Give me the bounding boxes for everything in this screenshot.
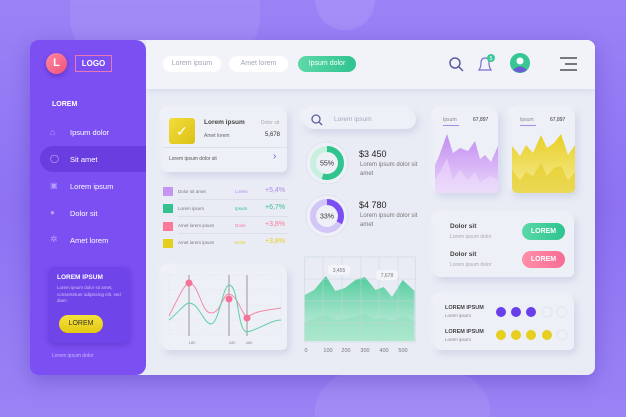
chart: line chart xyxy=(163,268,287,350)
text: Ipsum dolor xyxy=(309,60,345,67)
list: stats: Amet lorem ipsum xyxy=(178,240,214,245)
menu items: ⌂ xyxy=(50,127,55,137)
chart: yellow area: Ipsum xyxy=(520,117,534,123)
list: stats: Dolor sit amet xyxy=(178,189,206,194)
list: stats: Dolor xyxy=(235,240,246,245)
search bar xyxy=(304,110,416,129)
list: stats: +3,8% xyxy=(265,221,285,228)
menu highlight xyxy=(40,146,146,172)
panel: summary card: Lorem ipsum dolor sit xyxy=(169,156,217,162)
donut: 33%: $4 780 xyxy=(359,200,387,210)
promo box: LOREM IPSUM xyxy=(57,274,103,281)
panel: buttons: Dolor sit xyxy=(450,251,476,258)
menu items: ◯ xyxy=(50,154,59,163)
menu items xyxy=(50,127,113,245)
menu heading: LOREM xyxy=(52,101,77,108)
panel: rating dots: Lorem ipsum xyxy=(445,337,471,342)
logo circle: L xyxy=(53,57,60,69)
background blobs xyxy=(70,0,260,90)
sidebar footer: Lorem ipsum dolor xyxy=(52,353,93,359)
panel: buttons: LOREM xyxy=(531,256,556,263)
donut: 55%: $3 450 xyxy=(359,149,387,159)
chart: purple area xyxy=(435,110,498,193)
list: stats: Lorem ipsum xyxy=(178,206,204,211)
chart: green area chart: 400 xyxy=(379,348,389,354)
top icons xyxy=(449,53,577,73)
panel: rating dots: LOREM IPSUM xyxy=(445,305,484,311)
menu items: Amet lorem xyxy=(70,236,108,245)
panel: summary card: Dolor sit xyxy=(261,120,279,126)
list: stats: +6,7% xyxy=(265,204,285,211)
menu items: Sit amet xyxy=(70,155,98,164)
panel: rating dots: Lorem ipsum xyxy=(445,313,471,318)
menu items: ✲ xyxy=(50,234,58,244)
menu items: Dolor sit xyxy=(70,209,98,218)
list: stats: Lorem xyxy=(235,189,248,194)
menu items: ● xyxy=(50,208,55,217)
icon: shield: ✓ xyxy=(176,123,188,139)
donut: 55%: 55% xyxy=(320,160,334,168)
logo box: LOGO xyxy=(82,59,105,68)
chart: green area chart xyxy=(304,256,416,354)
icon: shield xyxy=(169,118,195,144)
panel: rating dots: LOREM IPSUM xyxy=(445,329,484,335)
donut: 33%: Lorem ipsum dolor sit amet xyxy=(360,213,417,228)
chart: yellow area: 67,897 xyxy=(550,117,565,123)
logo circle xyxy=(46,53,67,74)
chart: green area chart: 200 xyxy=(341,348,351,354)
list: stats: Dolor xyxy=(235,223,246,228)
panel: rating dots xyxy=(435,297,574,350)
chart: green area chart: 0 xyxy=(304,348,308,354)
top bar xyxy=(146,40,595,89)
panel: buttons: Lorem ipsum dolor xyxy=(450,234,491,240)
chart: line chart: 340 xyxy=(229,340,236,345)
donut: 33%: 33% xyxy=(320,214,334,220)
donut: 33% xyxy=(306,195,418,238)
search bar: Lorem ipsum xyxy=(334,116,372,123)
icon: search xyxy=(450,58,463,71)
donut: 55%: Lorem ipsum dolor sit amet xyxy=(360,162,417,177)
icon: bell: 5 xyxy=(490,56,493,62)
menu items: Lorem ipsum xyxy=(70,182,113,191)
panel: buttons: LOREM xyxy=(531,228,556,235)
panel: buttons: Lorem ipsum dolor xyxy=(450,262,491,268)
list: stats: +3,8% xyxy=(265,238,285,245)
list: stats xyxy=(163,187,288,248)
panel: summary card: Amet lorem xyxy=(204,133,230,139)
promo box: Lorem ipsum dolor sit amet, consectetuer adipiscing elit, sed diam xyxy=(57,285,121,303)
icon: menu xyxy=(560,58,577,70)
panel: summary card: Lorem ipsum xyxy=(204,119,245,126)
promo box: LOREM xyxy=(69,320,93,327)
panel: summary card: 5,678 xyxy=(265,132,280,138)
chart: green area chart: 500 xyxy=(398,348,408,354)
chart: green area chart: 7,678 xyxy=(381,273,393,279)
chart: purple area: 67,897 xyxy=(473,117,488,123)
chart: green area chart: 3,455 xyxy=(333,268,345,274)
top pills xyxy=(163,56,221,72)
panel: buttons xyxy=(435,215,574,277)
chart: yellow area xyxy=(512,110,575,193)
panel: summary card xyxy=(163,110,287,172)
chart: green area chart: 100 xyxy=(323,348,333,354)
chart: line chart: 180 xyxy=(189,340,196,345)
main dashboard card xyxy=(30,40,595,375)
chart: purple area: Ipsum xyxy=(443,117,457,123)
list: stats: Amet lorem ipsum xyxy=(178,223,214,228)
list: stats: +5,4% xyxy=(265,187,285,194)
text: Amet lorem xyxy=(241,60,276,67)
chart: line chart: 460 xyxy=(246,340,253,345)
promo box xyxy=(49,267,130,343)
panel: buttons: Dolor sit xyxy=(450,223,476,230)
panel: summary card: › xyxy=(273,151,276,162)
top pills: Lorem ipsum xyxy=(172,60,212,67)
sidebar xyxy=(30,40,146,375)
menu items: Ipsum dolor xyxy=(70,128,109,137)
logo box xyxy=(75,55,112,72)
icon: avatar xyxy=(510,53,530,73)
menu items: ▣ xyxy=(50,181,58,190)
list: stats: Ipsum xyxy=(235,206,247,211)
chart: green area chart: 300 xyxy=(360,348,370,354)
donut: 55% xyxy=(306,142,418,184)
